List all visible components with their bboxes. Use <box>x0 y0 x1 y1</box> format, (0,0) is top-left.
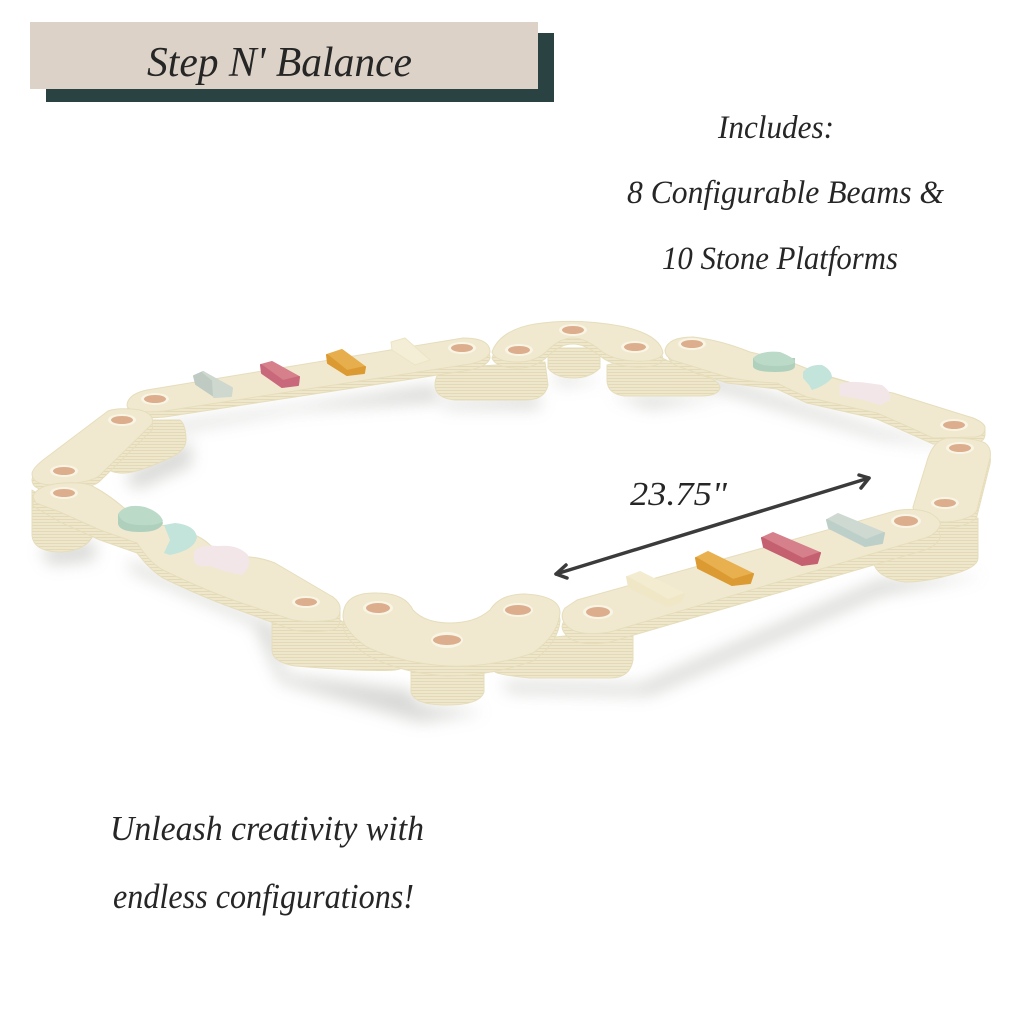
stone platform: front centre peg <box>411 660 484 705</box>
arch beam: back centre <box>492 321 663 368</box>
double-headed dimension arrow <box>556 475 869 578</box>
stone platform: right base <box>873 518 978 582</box>
stone platform: back left base <box>435 362 548 400</box>
stone: green drop <box>118 506 163 532</box>
stone: pink wave <box>839 382 890 405</box>
stone: grey bar <box>827 514 884 546</box>
includes text block: 10 Stone Platforms <box>662 241 898 277</box>
dimension label: 23.75" <box>630 476 728 513</box>
stone: orange bar <box>327 350 365 375</box>
stone: red bar <box>261 362 299 387</box>
beam: right short <box>913 438 990 528</box>
stone platform: back centre peg <box>548 348 600 378</box>
title banner <box>30 22 554 102</box>
stone: teal drop <box>803 365 832 390</box>
stone: red bar <box>762 533 820 565</box>
tagline text block: Unleash creativity with <box>110 809 424 848</box>
stone: cream bar <box>391 338 430 365</box>
stone platform: far left peg <box>32 490 95 552</box>
includes text block: 8 Configurable Beams & <box>627 175 944 211</box>
title banner: Step N' Balance <box>147 40 412 86</box>
arch beam: front centre <box>343 593 560 676</box>
stone: orange bar <box>696 552 753 585</box>
tagline text block: endless configurations! <box>113 877 414 916</box>
beam: back left with bar stones <box>127 338 490 418</box>
beam: back right wavy with shaped stones <box>665 337 985 444</box>
includes text block <box>627 110 944 277</box>
beam: front left wavy with shaped stones <box>33 483 340 632</box>
stone platform: left base <box>107 420 186 473</box>
stone: teal drop <box>164 523 197 555</box>
stone platform: back right base <box>607 355 720 396</box>
beam: left short <box>32 409 152 491</box>
beam: front right with bar stones <box>562 509 940 644</box>
includes text block: Includes: <box>717 110 834 146</box>
stone: green drop <box>753 352 795 372</box>
stone: pink wave <box>194 546 249 575</box>
stone platform: front left base <box>272 620 404 670</box>
stone platform: front right base <box>495 630 633 678</box>
stone: cream bar <box>627 572 684 606</box>
tagline text block <box>110 809 424 916</box>
stone: grey bar <box>194 372 232 397</box>
